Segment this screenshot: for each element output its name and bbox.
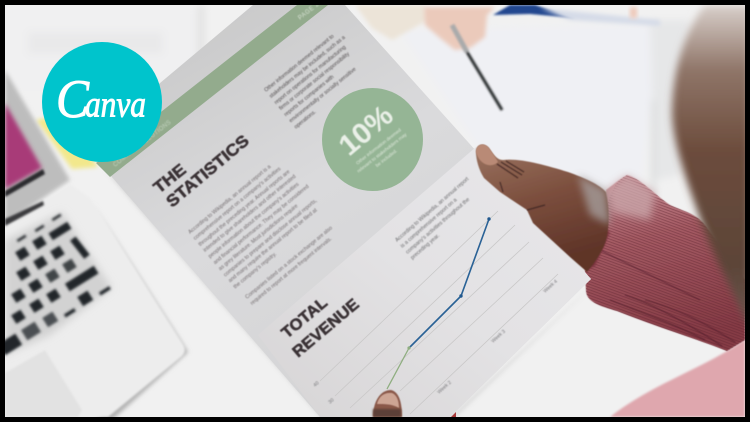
hinge — [5, 201, 44, 226]
line chart — [312, 211, 559, 414]
pale blue strip tail — [540, 8, 660, 26]
band label: COMPANY SOLUTIONS — [113, 120, 173, 169]
stat caption: relevant to stakeholders may — [356, 132, 409, 174]
body text: annual report: comprehensive report on a company's activities — [192, 166, 283, 242]
thumbnail — [476, 145, 498, 165]
axis labels: 40 — [312, 380, 321, 388]
body text: annual report: throughout the preceding year. Annual reports are — [198, 169, 291, 248]
sweater cuff — [585, 175, 745, 351]
hand shape — [476, 145, 609, 272]
axis labels: Week 3 — [490, 329, 507, 344]
body text: annual report: According to Wikipedia, an annual report is a — [187, 164, 272, 236]
thumb at bottom — [373, 390, 402, 417]
blurred background papers — [198, 8, 686, 187]
body text: annual report: as grey literature. Most jurisdictions require — [218, 203, 299, 272]
body text: annual report: people information about the company's activities — [208, 182, 301, 260]
body text: chart note: company's activities throughout the — [405, 197, 471, 255]
trackpad — [5, 350, 82, 417]
heading: the statistics: STATISTICS — [163, 132, 253, 211]
data points — [407, 217, 491, 350]
beige desk item — [355, 5, 428, 40]
body text: other information: firms or corporate social responsibility — [278, 51, 351, 112]
body text: stock exchange: required to report at more frequent intervals. — [249, 236, 333, 307]
logo wordmark: C — [56, 69, 90, 129]
body text: other information: reports for companies with — [283, 74, 335, 118]
holding hand — [476, 145, 610, 272]
thumb creases — [497, 161, 545, 210]
axis labels: Week 4 — [542, 279, 559, 294]
body text: stock exchange: Companies listed on a stock exchange are also — [244, 225, 334, 301]
cuff ribs — [585, 175, 745, 351]
axis labels: 30 — [327, 397, 336, 405]
paper shadow — [110, 176, 531, 417]
body text: annual report: intended to give shareholders and other interested — [203, 174, 298, 254]
laptop screen — [5, 103, 42, 189]
heading: the statistics: THE — [150, 161, 190, 197]
keyboard keys — [0, 214, 111, 355]
body text: annual report: and financial performance. They may be considered — [213, 184, 310, 266]
shaded thumb base — [373, 409, 401, 417]
thumbnail — [377, 393, 399, 408]
stat circle: 10% — [322, 88, 423, 191]
body text: annual report: the company's registry. — [233, 251, 278, 290]
laptop shadow — [98, 237, 190, 417]
keyboard well — [5, 212, 112, 355]
document — [85, 2, 595, 422]
body text: annual report: and many require the annual report to be filed at — [228, 207, 319, 284]
stat caption: Other information deemed — [355, 127, 403, 166]
body text: other information: report on operations for manufacturing — [273, 44, 347, 106]
body text: other information: operations. — [293, 109, 317, 130]
logo circle — [42, 42, 162, 162]
axis labels: Week 2 — [436, 380, 453, 395]
laptop — [0, 70, 188, 420]
cuff dark lower ribs — [600, 250, 735, 346]
body text: other information: environmentally or socially sensitive — [288, 67, 358, 124]
series: blue line — [409, 219, 489, 348]
logo wordmark — [56, 69, 146, 129]
body text: chart note: According to Wikipedia, an annual report — [394, 176, 471, 244]
icon: sticky note — [36, 115, 98, 169]
laptop body — [97, 232, 186, 417]
body text: other information: Other information deemed relevant to — [263, 34, 335, 94]
paper lower chart panel — [330, 148, 591, 417]
laptop lid — [5, 70, 70, 224]
heading: total revenue: REVENUE — [290, 296, 363, 361]
body text: chart note: preceding year. — [410, 233, 441, 261]
page label: PAGE 2 — [298, 2, 321, 22]
body text: other information: stakeholders may be included, such as a — [268, 35, 347, 100]
chart grid — [320, 211, 558, 414]
body text: chart note: is a comprehensive report on a — [400, 197, 458, 249]
blurred swatches — [630, 7, 637, 18]
red sweater peek — [451, 412, 456, 417]
background hand with pen — [355, 5, 660, 110]
body text: annual report — [188, 165, 318, 289]
canva logo — [42, 42, 162, 162]
heading: total revenue: TOTAL — [279, 294, 331, 342]
stat value: 10% — [333, 99, 400, 162]
stat caption — [352, 126, 413, 180]
washed-out wrist — [578, 175, 610, 225]
green header band — [96, 2, 328, 177]
screen bottom edge — [5, 169, 45, 197]
series: green segment — [387, 348, 409, 389]
cuff shape — [585, 175, 745, 351]
washed-out cuff top — [606, 175, 655, 220]
pen — [452, 25, 502, 110]
paper upper — [85, 5, 591, 417]
cuff inner band — [590, 230, 610, 268]
figure head — [672, 5, 750, 330]
blue folder strip — [493, 5, 575, 18]
hand — [424, 7, 495, 50]
stat caption: be included. — [375, 148, 399, 169]
shoulder — [610, 340, 745, 417]
body text: annual report: companies to prepare and disclose annual reports, — [223, 198, 318, 278]
logo wordmark: anva — [85, 84, 146, 126]
body text: other information — [263, 29, 371, 130]
axis labels — [312, 279, 559, 405]
body text: chart note — [394, 176, 486, 261]
